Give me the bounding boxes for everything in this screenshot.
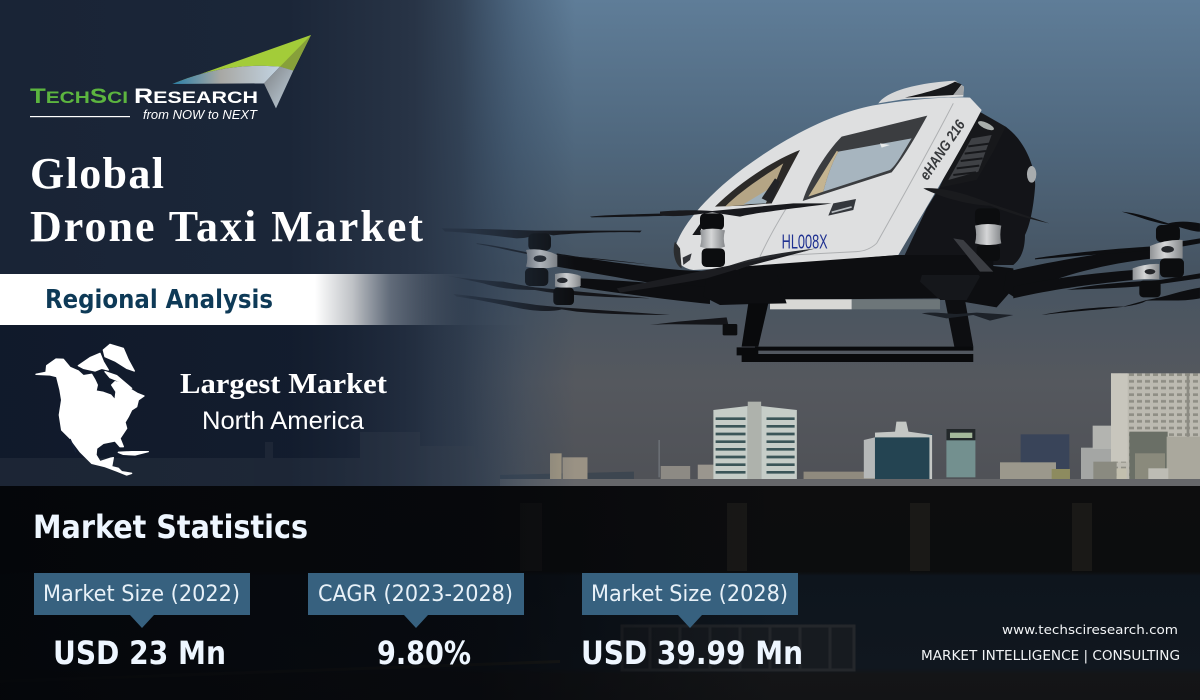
belly and right arms <box>740 212 1200 350</box>
second right motor <box>1133 264 1161 297</box>
logo <box>30 35 311 122</box>
market statistics heading: Market Statistics <box>33 508 308 546</box>
stat: market size 2028: USD 39.99 Mn <box>581 634 803 672</box>
model mark: eHANG 216 <box>917 117 969 183</box>
drone taxi <box>420 81 1200 362</box>
bridge piers <box>520 503 1092 571</box>
sensor rail <box>770 299 940 309</box>
logo wordmark green: TECH SCI <box>30 85 128 108</box>
right landing leg <box>945 300 973 350</box>
road marking <box>0 660 560 683</box>
stat: market size 2028 <box>581 573 803 672</box>
stat: cagr: CAGR (2023-2028) <box>318 582 513 607</box>
right skyline <box>1000 373 1200 483</box>
left arms and rotors <box>420 211 737 335</box>
logo rule <box>30 116 130 117</box>
logo wordmark white: RESEARCH <box>134 85 258 108</box>
title: Drone Taxi Market <box>30 202 423 251</box>
website and tagline <box>921 622 1180 664</box>
stat: market size 2022 <box>34 573 250 672</box>
door handle <box>828 199 856 216</box>
logo tagline: from NOW to NEXT <box>143 107 258 122</box>
front-left motor <box>700 213 725 267</box>
nose details <box>674 242 682 268</box>
bottom statistics band <box>0 486 1200 700</box>
sky background <box>0 0 1200 490</box>
tall white building <box>1111 373 1200 480</box>
front-left rotor <box>660 203 832 217</box>
left motor one <box>525 233 557 286</box>
largest market: North America <box>202 407 364 435</box>
far right motor <box>1150 225 1184 277</box>
roof cap <box>878 81 964 103</box>
title: Global <box>30 149 164 198</box>
faded left skyline <box>0 432 480 486</box>
city skyline <box>500 402 975 480</box>
title <box>30 149 423 251</box>
regional analysis band <box>0 274 470 325</box>
camera mount <box>723 324 737 335</box>
stat: market size 2028: Market Size (2028) <box>591 582 788 607</box>
lower right blades <box>922 313 1013 321</box>
right motor <box>975 208 1001 261</box>
icon: north america map <box>36 344 148 475</box>
stat: market size 2022: Market Size (2022) <box>43 582 240 607</box>
stat: cagr <box>308 573 524 672</box>
website and tagline: MARKET INTELLIGENCE | CONSULTING <box>921 649 1180 664</box>
logo mark <box>172 35 311 108</box>
front lower rotor <box>617 250 810 293</box>
big window <box>803 116 927 201</box>
door seam <box>760 103 953 257</box>
left front body and landing bars <box>703 263 973 362</box>
rear dome <box>900 110 1036 265</box>
bridge fence <box>622 626 854 670</box>
small window <box>715 150 800 207</box>
white shell <box>675 97 982 270</box>
stat: market size 2022: USD 23 Mn <box>53 634 226 672</box>
horizon road line <box>500 479 1200 487</box>
main white tower <box>713 402 797 479</box>
green glass building <box>946 429 975 477</box>
registration: HL008X <box>782 231 828 253</box>
stat: cagr: 9.80% <box>377 634 471 672</box>
largest market <box>180 369 388 435</box>
right rotor blades <box>923 188 1049 223</box>
left dark overlay <box>0 0 575 490</box>
left motor two <box>553 273 581 305</box>
website and tagline: www.techsciresearch.com <box>1002 622 1178 637</box>
regional analysis band: Regional Analysis <box>45 285 273 315</box>
largest market: Largest Market <box>180 369 388 400</box>
teal glass building <box>875 422 932 479</box>
dark lower shell trim <box>740 255 993 275</box>
lower left darkening <box>0 325 530 490</box>
cabin <box>660 81 1049 275</box>
